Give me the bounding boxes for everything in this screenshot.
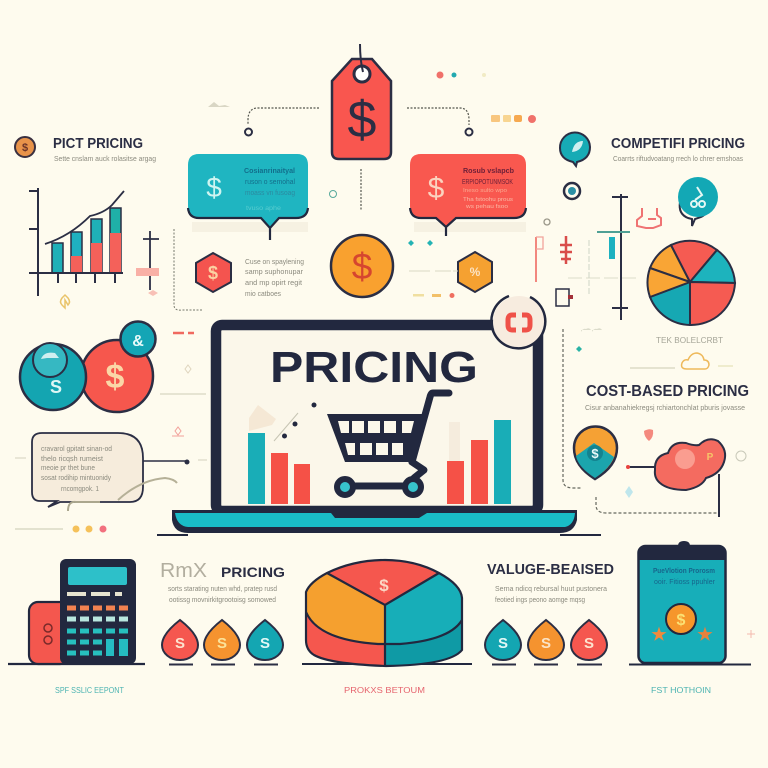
decorative dots top right xyxy=(208,72,536,198)
heading: cost-based pricing xyxy=(585,383,749,412)
icon: cost pin: $ xyxy=(591,446,599,461)
icons: teardrop coins right: S xyxy=(584,635,594,652)
icon: orange hexagon: % xyxy=(470,265,481,279)
tablet card: $ xyxy=(677,612,686,629)
callout: teal bubble: ruson o semohal xyxy=(245,179,295,186)
bar chart: left xyxy=(29,188,124,296)
icon: orange coin: $ xyxy=(352,246,372,287)
decorative marks centre right xyxy=(408,219,573,306)
badge on laptop corner xyxy=(491,296,545,348)
heading: fix pricing xyxy=(160,560,285,604)
caption: tablet: FST HOTHOIN xyxy=(651,686,711,695)
tablet card: ooir. Fitioss ppuhler xyxy=(654,579,716,586)
heading: value-based: Serna ndicq rebursal huut pustonera xyxy=(495,584,608,593)
price tag icon xyxy=(332,44,391,159)
heading: competitive pricing: Coarrts riftudvoatang rrech lo chrer emshoas xyxy=(613,154,743,163)
icon: cloud xyxy=(576,328,733,369)
callout: note bubble: meoie pr thet bune xyxy=(41,463,95,472)
text block: hexagon note: and mp opirt regit xyxy=(245,278,303,287)
heading: value-based xyxy=(487,562,614,604)
axis: competitive chart xyxy=(568,194,640,320)
callout: teal bubble: tvuso aphe xyxy=(246,206,282,212)
heading: fix pricing: ootissg movnirkitgrootoisg somowed xyxy=(169,595,276,604)
laptop base xyxy=(157,510,601,535)
callout: note bubble: rncomgpok. 1 xyxy=(61,484,99,493)
icon: cost pin xyxy=(574,426,617,479)
icons: teardrop coins left: S xyxy=(217,635,227,652)
screen bars left xyxy=(248,402,316,504)
heading: pict pricing: PICT PRICING xyxy=(53,136,143,152)
callout: teal bubble: moass vn fusoag xyxy=(245,190,295,197)
icon: red cost cluster xyxy=(625,429,746,517)
laptop screen xyxy=(216,325,538,511)
icon: red hexagon: $ xyxy=(208,263,218,283)
icons: teardrop coins left: S xyxy=(175,635,185,652)
icon: red connector mark xyxy=(637,208,661,228)
overlapping coins icon xyxy=(20,322,156,412)
heading: fix pricing: PRICING xyxy=(221,564,285,580)
heading: pict pricing xyxy=(15,136,156,163)
tablet card xyxy=(629,541,755,664)
icons: teardrop coins right: S xyxy=(541,635,551,652)
heading: value-based: VALUGE-BEAISED xyxy=(487,562,614,578)
pie chart xyxy=(648,241,735,325)
heading: cost-based pricing: Cisur anbanahiekregsj rchiartonchlat pburis jovasse xyxy=(585,403,745,412)
callout: teal bubble: Cosianrinaityal xyxy=(244,168,295,175)
heading: fix pricing: RmX xyxy=(160,560,207,582)
callout: teal bubble: $ xyxy=(206,172,222,203)
text block: hexagon note xyxy=(245,257,304,298)
icon: calculator and wallet xyxy=(8,559,145,664)
callout: red bubble: ERPIOPOTUNMSOK xyxy=(462,179,513,186)
connector end rings xyxy=(245,128,472,136)
icon: orange hexagon xyxy=(458,252,492,292)
text block: hexagon note: Cuse on spaylening xyxy=(245,257,304,266)
icon: small ring badge xyxy=(564,183,580,199)
overlapping coins icon: $ xyxy=(106,358,125,396)
callout: red bubble: ws pehau fsoo xyxy=(466,204,508,210)
callout: red bubble xyxy=(410,154,526,236)
callout: note bubble: thelo ricqsh rumeist xyxy=(41,454,104,463)
callout: note bubble: sosat rodihip mintuonidy xyxy=(41,473,111,482)
heading: cost-based pricing: COST-BASED PRICING xyxy=(586,383,749,400)
callout: teal bubble xyxy=(188,154,308,240)
icons: teardrop coins left: S xyxy=(260,635,270,652)
callout: red bubble: Rosub vslapcb xyxy=(463,168,514,175)
overlapping coins icon: S xyxy=(50,377,62,397)
icon: red cost cluster: P xyxy=(707,452,714,463)
heading: pict pricing: $ xyxy=(22,142,28,154)
tablet card: ★ xyxy=(651,625,667,644)
price tag icon: $ xyxy=(348,91,377,149)
icons: teardrop coins right xyxy=(485,620,607,664)
callout: note bubble xyxy=(32,433,190,511)
icon: orange coin xyxy=(331,235,393,297)
callout: red bubble: $ xyxy=(428,172,445,205)
overlapping coins icon: & xyxy=(132,333,144,350)
icons: teardrop coins left xyxy=(162,620,283,664)
shopping cart xyxy=(327,393,449,495)
callout: red bubble: Ineso sulto wpo xyxy=(463,188,507,194)
dotted divider: right xyxy=(563,329,718,513)
heading: competitive pricing xyxy=(560,132,745,166)
caption: calculator: SPF SSLIC EEPONT xyxy=(55,686,124,695)
tablet card: PueVlotion Prorosm xyxy=(653,568,715,575)
pie caption: TEK BOLELCRBT xyxy=(656,335,723,345)
text block: hexagon note: samp suphonupar xyxy=(245,267,303,276)
text block: hexagon note: mio catboes xyxy=(245,289,281,298)
icon: red hexagon xyxy=(196,253,231,292)
icon: teal pin xyxy=(678,177,718,226)
dotted connectors around tag xyxy=(248,108,469,210)
laptop xyxy=(157,296,601,535)
dotted divider: left xyxy=(174,229,202,310)
caption: disk chart: PROKXS BETOUM xyxy=(344,686,425,695)
callout: red bubble: Tha fstoohu prous xyxy=(463,197,514,203)
heading: fix pricing: sorts starating nuten whd, pratep rusd xyxy=(168,584,277,593)
icons: teardrop coins right: S xyxy=(498,635,508,652)
decorative marks: left gutter xyxy=(15,333,207,532)
disk pie chart: $ xyxy=(379,576,389,595)
laptop title: PRICING xyxy=(270,343,478,392)
icon: cross marker xyxy=(60,231,159,308)
screen bars right xyxy=(447,420,511,504)
heading: value-based: feotied ings peono aomge mqsg xyxy=(495,595,585,604)
tablet card: ★ xyxy=(697,625,713,644)
disk pie chart xyxy=(302,560,472,666)
callout: note bubble: cravarol gpitatt sinan-od xyxy=(41,444,112,453)
heading: pict pricing: Sette cnslam auck rolasitse argag xyxy=(54,154,156,163)
heading: competitive pricing: COMPETIFI PRICING xyxy=(611,136,745,152)
